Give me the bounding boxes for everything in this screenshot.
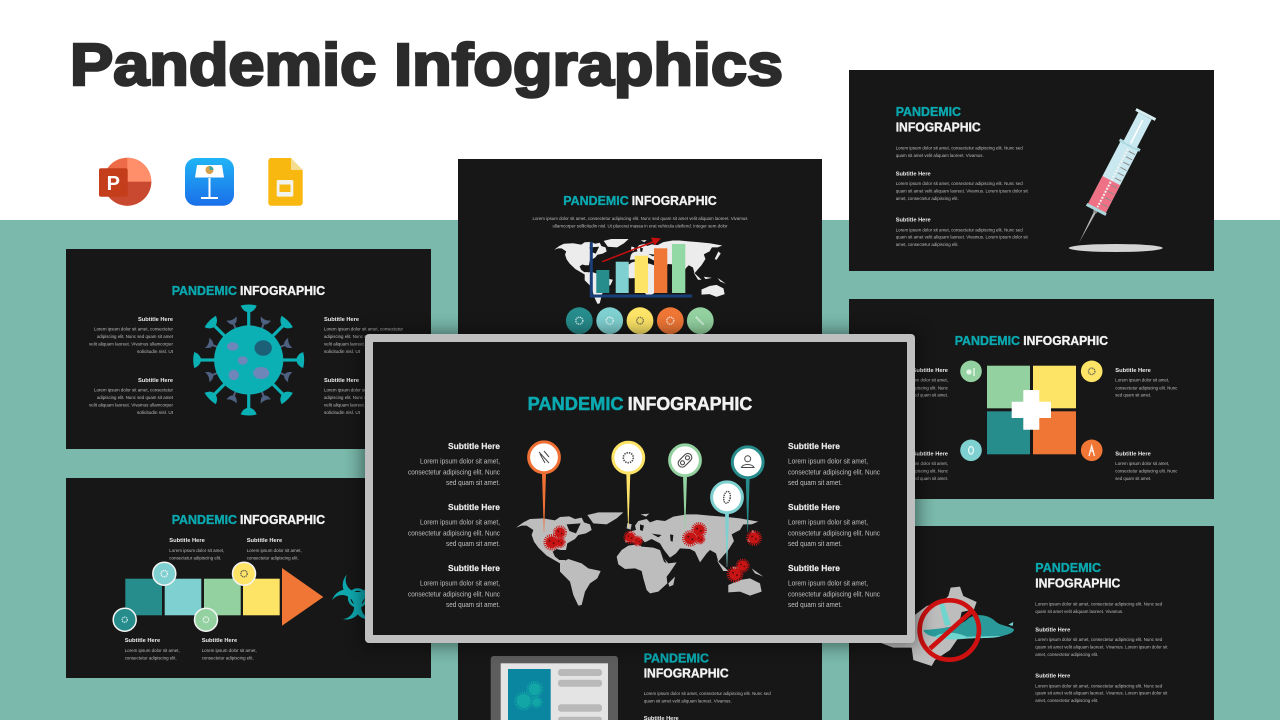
right text blocks: consectetur adipiscing elit. Nunc — [1115, 385, 1178, 390]
process text blocks: Subtitle Here — [169, 538, 206, 544]
process text blocks: Lorem ipsum dolor sit amet, — [169, 548, 224, 553]
text blocks: amet, consectetur adipiscing elit. — [896, 196, 959, 201]
text blocks: Lorem ipsum dolor sit amet, consectetur adipiscing elit. Nunc sed — [896, 227, 1023, 232]
text block: quam sit amet velit aliquam laoreet. Vivamus. — [644, 699, 732, 704]
intro text: ullamcorper sollicitudin nisl. Ut placerat massa in erat vehicula eleifend. Integer sem dolor — [552, 224, 728, 228]
right text blocks: solicitudin nisl. Ut — [324, 410, 361, 415]
process text blocks: consectetur adipiscing elit. — [125, 656, 177, 661]
right text blocks: Subtitle Here — [324, 317, 360, 323]
panel title: INFOGRAPHIC — [1023, 333, 1109, 348]
right text blocks: sed quam sit amet. — [788, 478, 842, 487]
right text blocks: adipiscing elit. Nunc sed quam sit amet — [324, 334, 401, 339]
panel title: PANDEMIC — [644, 651, 710, 666]
left text blocks — [89, 317, 174, 415]
pin: yellow — [613, 442, 644, 528]
icon: Google Slides — [268, 158, 303, 206]
text blocks: quam sit amet velit aliquam laoreet. Vivamus. Lorem ipsum dolor sit — [896, 235, 1028, 240]
right text blocks: Lorem ipsum dolor sit amet, consectetur — [324, 388, 403, 393]
left text blocks: Subtitle Here — [138, 317, 174, 323]
panel: right, travel ban — [847, 526, 1214, 720]
left text blocks: consectetur adipiscing elit. Nunc — [408, 590, 500, 598]
panel: main world map — [365, 334, 915, 643]
icon: coronavirus — [193, 304, 304, 416]
main title: Pandemic Infographics — [70, 32, 783, 98]
main panel shadow — [362, 332, 918, 646]
left text blocks: consectetur adipiscing elit. Nunc — [408, 468, 500, 476]
text blocks: Lorem ipsum dolor sit amet, consectetur adipiscing elit. Nunc sed — [896, 145, 1023, 150]
left text blocks: Lorem ipsum dolor sit amet, consectetur — [94, 327, 173, 332]
left text blocks: sed quam sit amet. — [446, 539, 500, 548]
left text blocks: Subtitle Here — [138, 378, 174, 384]
right text blocks: Subtitle Here — [788, 441, 840, 451]
main panel title — [528, 393, 752, 414]
right text blocks: velit aliquam laoreet. Vivamus ullamcorper — [324, 342, 408, 346]
left text blocks: sed quam sit amet. — [446, 478, 500, 487]
right text blocks — [788, 441, 880, 609]
right text blocks: consectetur adipiscing elit. Nunc — [788, 590, 880, 598]
text blocks: Lorem ipsum dolor sit amet, consectetur adipiscing elit. Nunc sed — [1035, 637, 1163, 642]
left text blocks: velit aliquam laoreet. Vivamus ullamcorper — [89, 342, 173, 346]
left text blocks: Lorem ipsum dolor sit amet, — [894, 461, 948, 466]
left text blocks: Subtitle Here — [448, 441, 500, 451]
left text blocks — [408, 441, 500, 609]
icon: banned flight over China — [847, 587, 1014, 666]
left text blocks: Subtitle Here — [912, 368, 949, 374]
panel title — [955, 333, 1109, 348]
text blocks: Lorem ipsum dolor sit amet, consectetur adipiscing elit. Nunc sed — [896, 181, 1023, 186]
panel title — [644, 651, 729, 680]
white cross — [1012, 390, 1051, 430]
panel title: INFOGRAPHIC — [1035, 575, 1121, 590]
text blocks — [1035, 601, 1168, 703]
left text blocks: Lorem ipsum dolor sit amet, — [420, 456, 500, 466]
left text blocks: Lorem ipsum dolor sit amet, — [420, 578, 500, 588]
panel title — [172, 283, 326, 298]
right text blocks: solicitudin nisl. Ut — [324, 349, 361, 354]
pin: green — [670, 445, 700, 530]
process text blocks: Subtitle Here — [247, 538, 283, 544]
panel title: INFOGRAPHIC — [644, 665, 729, 680]
intro text: Lorem ipsum dolor sit amet, consectetur adipiscing elit. Nunc sed quam sit amet velit aliquam laoreet. Vivamus — [532, 216, 748, 221]
text blocks: Lorem ipsum dolor sit amet, consectetur adipiscing elit. Nunc sed — [1035, 601, 1163, 606]
icon circles row — [566, 307, 714, 334]
icon: PowerPoint: P — [107, 173, 120, 195]
panel title: PANDEMIC — [172, 512, 238, 527]
right text blocks: Subtitle Here — [788, 502, 840, 512]
left text blocks: sed quam sit amet. — [446, 600, 500, 609]
text blocks: quam sit amet velit aliquam laoreet. Vivamus. Lorem ipsum dolor sit — [1035, 691, 1168, 696]
right text blocks: Lorem ipsum dolor sit amet, — [1115, 461, 1169, 466]
world map — [554, 239, 726, 304]
text blocks: quam sit amet velit aliquam laoreet. Vivamus. — [896, 153, 984, 158]
left text blocks: sed quam sit amet. — [912, 393, 948, 398]
main panel title: PANDEMIC — [528, 393, 624, 414]
left text blocks: sed quam sit amet. — [912, 476, 948, 481]
text blocks: amet, consectetur adipiscing elit. — [1035, 652, 1098, 657]
panel title — [896, 104, 981, 134]
icon: tablet with report — [491, 656, 618, 720]
right text blocks: adipiscing elit. Nunc sed quam sit amet — [324, 395, 401, 400]
corner icons — [960, 360, 1102, 461]
panel: left, virus — [66, 249, 431, 449]
right text blocks: Lorem ipsum dolor sit amet, consectetur — [324, 327, 403, 332]
text blocks: Subtitle Here — [1035, 673, 1071, 679]
shadow ellipse — [1069, 244, 1163, 252]
main panel title: INFOGRAPHIC — [628, 393, 752, 414]
left text blocks: Subtitle Here — [448, 502, 500, 512]
right text blocks: consectetur adipiscing elit. Nunc — [788, 468, 880, 476]
text block: Lorem ipsum dolor sit amet, consectetur adipiscing elit. Nunc sed — [644, 691, 771, 696]
panel title: PANDEMIC — [955, 333, 1021, 348]
left text blocks: Lorem ipsum dolor sit amet, — [420, 518, 500, 526]
right text blocks: Subtitle Here — [788, 563, 840, 573]
pin: orange — [529, 442, 559, 532]
world map — [516, 512, 763, 606]
panel title — [172, 512, 326, 527]
right text blocks: Lorem ipsum dolor sit amet, — [788, 518, 868, 526]
panel title — [1035, 560, 1121, 590]
pin: dark teal — [732, 447, 763, 532]
quadrant squares — [987, 366, 1076, 454]
pin: light teal — [712, 482, 742, 567]
left text blocks: solicitudin nisl. Ut — [137, 410, 174, 415]
icon: biohazard — [330, 574, 386, 623]
text blocks — [896, 145, 1028, 247]
right text blocks: Lorem ipsum dolor sit amet, — [788, 578, 868, 588]
process text blocks: Lorem ipsum dolor sit amet, — [125, 648, 180, 653]
panel: left, arrow process — [66, 478, 431, 678]
panel: right, medical cross — [849, 299, 1214, 499]
process text blocks: consectetur adipiscing elit. — [202, 656, 254, 661]
left text blocks: adipiscing elit. Nunc sed quam sit amet — [97, 395, 174, 400]
process text blocks: consectetur adipiscing elit. — [169, 556, 221, 561]
bar chart — [591, 238, 692, 296]
text blocks: amet, consectetur adipiscing elit. — [896, 242, 959, 247]
icon: Keynote — [185, 158, 234, 206]
left text blocks: Lorem ipsum dolor sit amet, — [894, 378, 948, 383]
right text blocks: Subtitle Here — [324, 378, 360, 384]
process text blocks: Lorem ipsum dolor sit amet, — [247, 548, 302, 553]
panel: top centre, bar chart on map — [458, 159, 822, 349]
left text blocks: Subtitle Here — [912, 451, 949, 457]
right text blocks: Subtitle Here — [1115, 451, 1152, 457]
panel title: INFOGRAPHIC — [632, 193, 717, 208]
panel title: INFOGRAPHIC — [240, 283, 326, 298]
step icons — [113, 562, 256, 631]
right text blocks: Subtitle Here — [1115, 368, 1152, 374]
process text blocks: Subtitle Here — [202, 638, 238, 644]
right text blocks: Lorem ipsum dolor sit amet, — [1115, 378, 1169, 383]
panel title: INFOGRAPHIC — [240, 512, 326, 527]
left text blocks: consectetur adipiscing elit. Nunc — [886, 469, 949, 474]
right text blocks: sed quam sit amet. — [1115, 476, 1151, 481]
right text blocks: consectetur adipiscing elit. Nunc — [788, 528, 880, 538]
right text blocks: consectetur adipiscing elit. Nunc — [1115, 469, 1178, 474]
text blocks: Lorem ipsum dolor sit amet, consectetur adipiscing elit. Nunc sed — [1035, 683, 1163, 688]
left text blocks: adipiscing elit. Nunc sed quam sit amet — [97, 334, 174, 339]
intro text — [532, 216, 748, 228]
text block — [644, 691, 771, 720]
icon: syringe — [1069, 108, 1157, 248]
left text blocks: consectetur adipiscing elit. Nunc — [408, 528, 500, 538]
right text blocks — [324, 317, 408, 415]
left text blocks: Subtitle Here — [448, 563, 500, 573]
left text blocks: solicitudin nisl. Ut — [137, 349, 174, 354]
left text blocks: velit aliquam laoreet. Vivamus ullamcorper — [89, 402, 173, 408]
process text blocks: Subtitle Here — [125, 638, 161, 644]
panel title: PANDEMIC — [1035, 560, 1102, 575]
left text blocks: consectetur adipiscing elit. Nunc — [886, 385, 949, 390]
text blocks: Subtitle Here — [896, 171, 931, 177]
right text blocks — [1115, 368, 1178, 481]
panel title: INFOGRAPHIC — [896, 119, 981, 134]
right text blocks: sed quam sit amet. — [788, 600, 842, 609]
right text blocks: sed quam sit amet. — [788, 539, 842, 548]
text blocks: Subtitle Here — [896, 217, 931, 223]
panel: bottom centre, report device — [458, 600, 822, 720]
text blocks: amet, consectetur adipiscing elit. — [1035, 698, 1098, 703]
text blocks: quam sit amet velit aliquam laoreet. Vivamus. — [1035, 609, 1123, 614]
arrow of squares — [125, 568, 323, 626]
left text blocks: Lorem ipsum dolor sit amet, consectetur — [94, 388, 173, 393]
right text blocks: velit aliquam laoreet. Vivamus ullamcorper — [324, 402, 408, 408]
text blocks: Subtitle Here — [1035, 627, 1071, 633]
panel: right, syringe — [849, 70, 1214, 271]
red virus clusters — [545, 523, 761, 581]
text blocks: quam sit amet velit aliquam laoreet. Vivamus. Lorem ipsum dolor sit — [1035, 645, 1168, 650]
panel title: PANDEMIC — [563, 193, 629, 208]
panel title — [563, 193, 717, 208]
process text blocks — [125, 538, 302, 661]
right text blocks: Lorem ipsum dolor sit amet, — [788, 456, 868, 466]
text blocks: quam sit amet velit aliquam laoreet. Vivamus. Lorem ipsum dolor sit — [896, 189, 1028, 194]
panel title: PANDEMIC — [896, 104, 962, 119]
icon: PowerPoint — [99, 158, 151, 206]
process text blocks: consectetur adipiscing elit. — [247, 556, 299, 561]
left text blocks — [886, 368, 949, 481]
panel title: PANDEMIC — [172, 283, 238, 298]
right text blocks: sed quam sit amet. — [1115, 393, 1151, 398]
process text blocks: Lorem ipsum dolor sit amet, — [202, 648, 257, 653]
